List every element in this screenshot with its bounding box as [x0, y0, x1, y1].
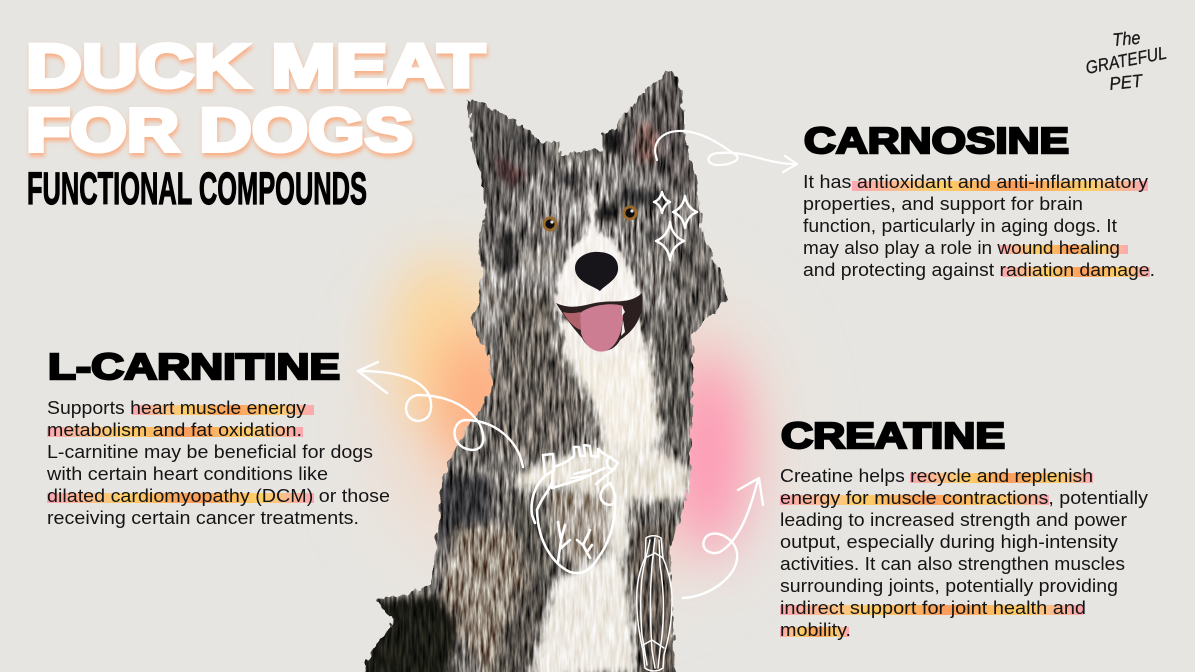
text: l-carnitine body: [46, 398, 390, 528]
subtitle: FUNCTIONAL COMPOUNDS: [27, 163, 367, 214]
title: [26, 32, 486, 168]
text: l-carnitine body: metabolism and fat oxidation.: [47, 420, 302, 440]
text: creatine body: mobility.: [780, 620, 851, 640]
logo: The: [1112, 28, 1141, 50]
text: creatine body: indirect support for joint health and: [780, 598, 1086, 618]
text: carnosine body: properties, and support for brain: [803, 194, 1083, 214]
icon: heart: [532, 445, 618, 573]
dog: chest: [560, 345, 662, 450]
illustration: dog photo: [364, 70, 728, 672]
text: l-carnitine body: dilated cardiomyopathy (DCM) or those: [47, 486, 390, 506]
dog: lip: [563, 312, 581, 330]
text: creatine body: energy for muscle contractions, potentially: [780, 488, 1148, 508]
text: creatine body: surrounding joints, potentially providing: [780, 576, 1118, 596]
text: creatine body: [780, 466, 1148, 640]
title: FOR DOGS: [26, 96, 413, 164]
title: DUCK MEAT: [26, 32, 485, 100]
icon: muscle: [637, 536, 672, 671]
text: l-carnitine body: with certain heart conditions like: [46, 464, 328, 484]
heading: l-carnitine: L-CARNITINE: [48, 346, 340, 387]
logo: PET: [1108, 70, 1145, 94]
dog: eyes: [542, 206, 638, 232]
highlights: carnosine: [852, 181, 1150, 277]
dog: nose: [575, 252, 618, 291]
text: carnosine body: may also play a role in wound healing: [803, 238, 1120, 258]
text: creatine body: activities. It can also strengthen muscles: [780, 554, 1125, 574]
arrow: to l-carnitine: [358, 362, 523, 467]
logo: [1084, 28, 1168, 94]
icon: sparkles: [654, 192, 697, 260]
text: carnosine body: [803, 172, 1155, 280]
text: creatine body: leading to increased strength and power: [780, 510, 1127, 530]
panel: l-carnitine: [46, 346, 390, 528]
panel: creatine: [780, 415, 1148, 640]
text: l-carnitine body: Supports heart muscle energy: [47, 398, 306, 418]
arrow: to carnosine: [655, 131, 797, 172]
logo: GRATEFUL: [1084, 43, 1168, 78]
highlights: l-carnitine: [47, 405, 314, 503]
text: l-carnitine body: receiving certain cancer treatments.: [47, 508, 359, 528]
heading: carnosine: CARNOSINE: [804, 120, 1069, 161]
text: l-carnitine body: L-carnitine may be beneficial for dogs: [47, 442, 373, 462]
text: carnosine body: It has antioxidant and anti-inflammatory: [803, 172, 1148, 192]
text: creatine body: output, especially during high-intensity: [780, 532, 1118, 552]
background glow: [385, 255, 765, 580]
text: carnosine body: function, particularly in aging dogs. It: [803, 216, 1117, 236]
dog: white muzzle: [555, 190, 645, 362]
heading: creatine: CREATINE: [781, 415, 1005, 456]
text: creatine body: Creatine helps recycle and replenish: [780, 466, 1093, 486]
dog: teeth: [621, 306, 625, 336]
dog: head: [490, 158, 696, 350]
dog: tongue: [580, 304, 623, 352]
highlights: creatine: [780, 473, 1093, 637]
dog: ears: [460, 65, 700, 250]
title: FOR DOGS: [27, 100, 414, 168]
text: carnosine body: and protecting against radiation damage.: [803, 260, 1155, 280]
arrow: to creatine: [683, 478, 763, 598]
panel: carnosine: [803, 120, 1155, 280]
dog: mouth: [556, 293, 643, 351]
title: DUCK MEAT: [27, 36, 486, 104]
